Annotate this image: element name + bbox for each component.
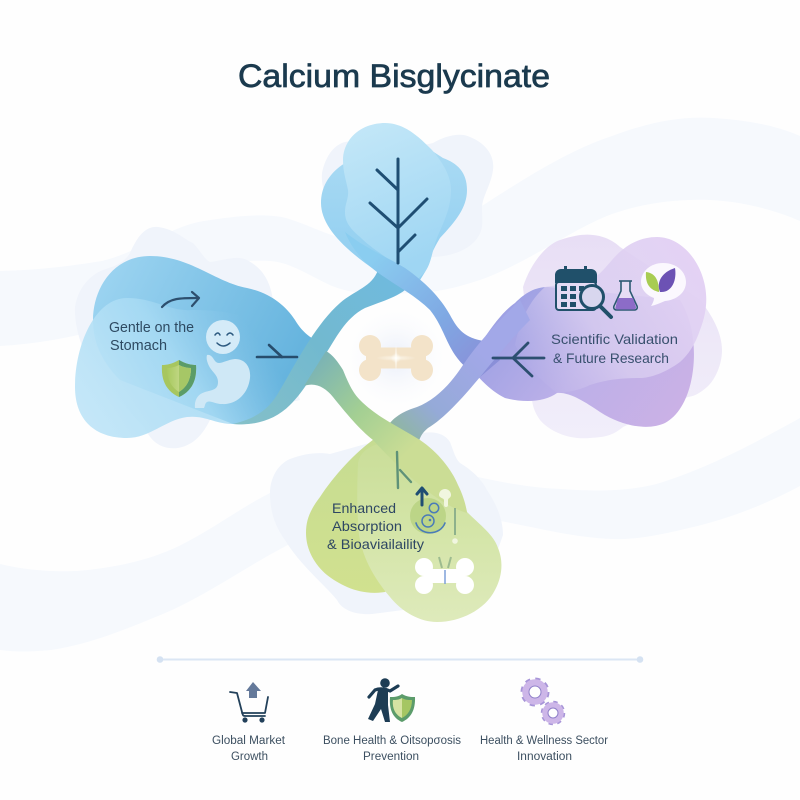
label: health and wellness: Health & Wellness Sector [480, 735, 608, 747]
label: scientific validation: & Future Research [553, 350, 669, 366]
icon: leaf speech bubble [641, 263, 686, 306]
icon: shopping cart [230, 682, 268, 723]
label: enhanced absorption: & Bioaviailaility [327, 536, 424, 552]
icon: runner with shield [368, 678, 415, 722]
label: gentle on the stomach [109, 320, 194, 354]
icon: tree branch [370, 159, 427, 263]
center bone icon [341, 303, 451, 413]
label: bone health [323, 735, 461, 763]
panel: top leaf [321, 123, 467, 286]
label: scientific validation [551, 331, 678, 366]
label: health and wellness [480, 735, 608, 763]
panel: bottom green blob [306, 437, 501, 622]
label: scientific validation: Scientific Validation [551, 331, 678, 347]
icon: gears [522, 680, 564, 724]
icon: white bone [415, 557, 474, 594]
green blob back shape [306, 437, 465, 593]
icon: green shield [162, 360, 196, 397]
ribbon: left to bottom [304, 351, 467, 513]
icon: calendar with magnifier [555, 266, 611, 317]
icon: curved arrow [162, 292, 199, 307]
label: gentle on the stomach: Stomach [110, 338, 167, 354]
left blob front shape [75, 298, 308, 438]
divider [157, 656, 643, 663]
ribbon: right to bottom [380, 300, 530, 446]
label: enhanced absorption: Absorption [332, 518, 402, 534]
purple blob back shape [475, 287, 694, 427]
background waves [0, 118, 800, 652]
label: global market growth [212, 735, 286, 763]
icon: absorption cells [410, 488, 458, 544]
label: global market growth: Growth [231, 751, 268, 763]
panel: left blob [75, 256, 315, 438]
title: Calcium Bisglycinate [238, 58, 550, 94]
label: gentle on the stomach: Gentle on the [109, 320, 194, 336]
label: bone health: Bone Health & Oitsopσosis [323, 735, 461, 747]
arrow: left branch [257, 345, 297, 357]
top leaf back shape [321, 130, 467, 286]
ghost shapes behind panels [75, 135, 722, 614]
top leaf front shape [343, 123, 451, 280]
label: global market growth: Global Market [212, 735, 286, 747]
icon: flask [614, 281, 637, 310]
ribbon: left to top [233, 270, 405, 424]
label: health and wellness: Innovation [517, 751, 572, 763]
label: enhanced absorption: Enhanced [332, 500, 396, 516]
green blob front shape [357, 441, 501, 622]
panel: right purple blob [475, 237, 706, 427]
label: bone health: Prevention [363, 751, 419, 763]
ribbon: top to right [345, 232, 500, 377]
purple blob front shape [515, 237, 706, 393]
arrow: bottom branch [397, 452, 411, 488]
left blob back shape [93, 256, 315, 424]
arrow: right branch [493, 343, 544, 376]
label: enhanced absorption [327, 500, 424, 552]
icon: smiling stomach [195, 320, 250, 408]
